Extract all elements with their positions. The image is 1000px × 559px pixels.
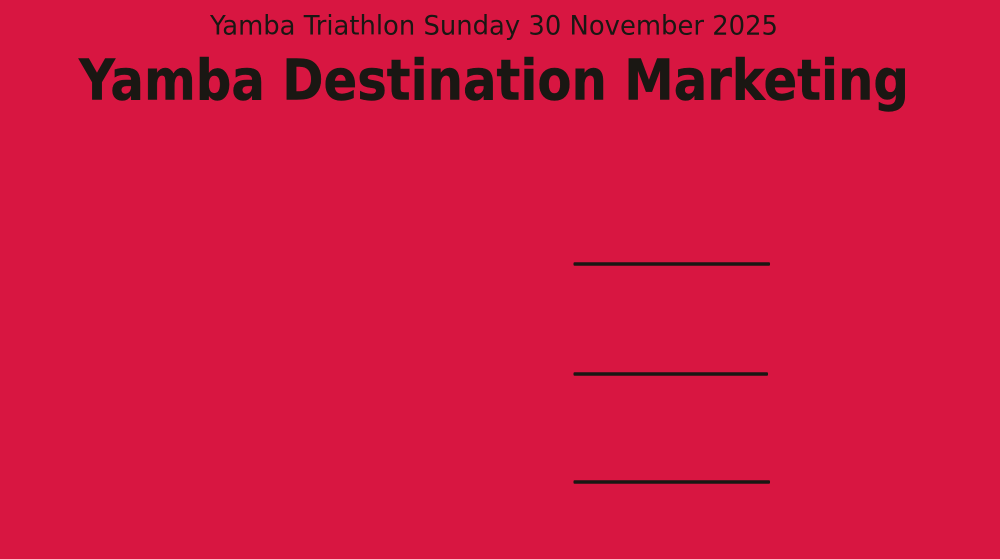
rule 1 [574, 262, 770, 266]
title: Yamba Destination Marketing [78, 48, 909, 114]
rule 2 [574, 372, 768, 376]
subtitle: Yamba Triathlon Sunday 30 November 2025 [209, 10, 778, 42]
rule 3 [574, 480, 770, 484]
